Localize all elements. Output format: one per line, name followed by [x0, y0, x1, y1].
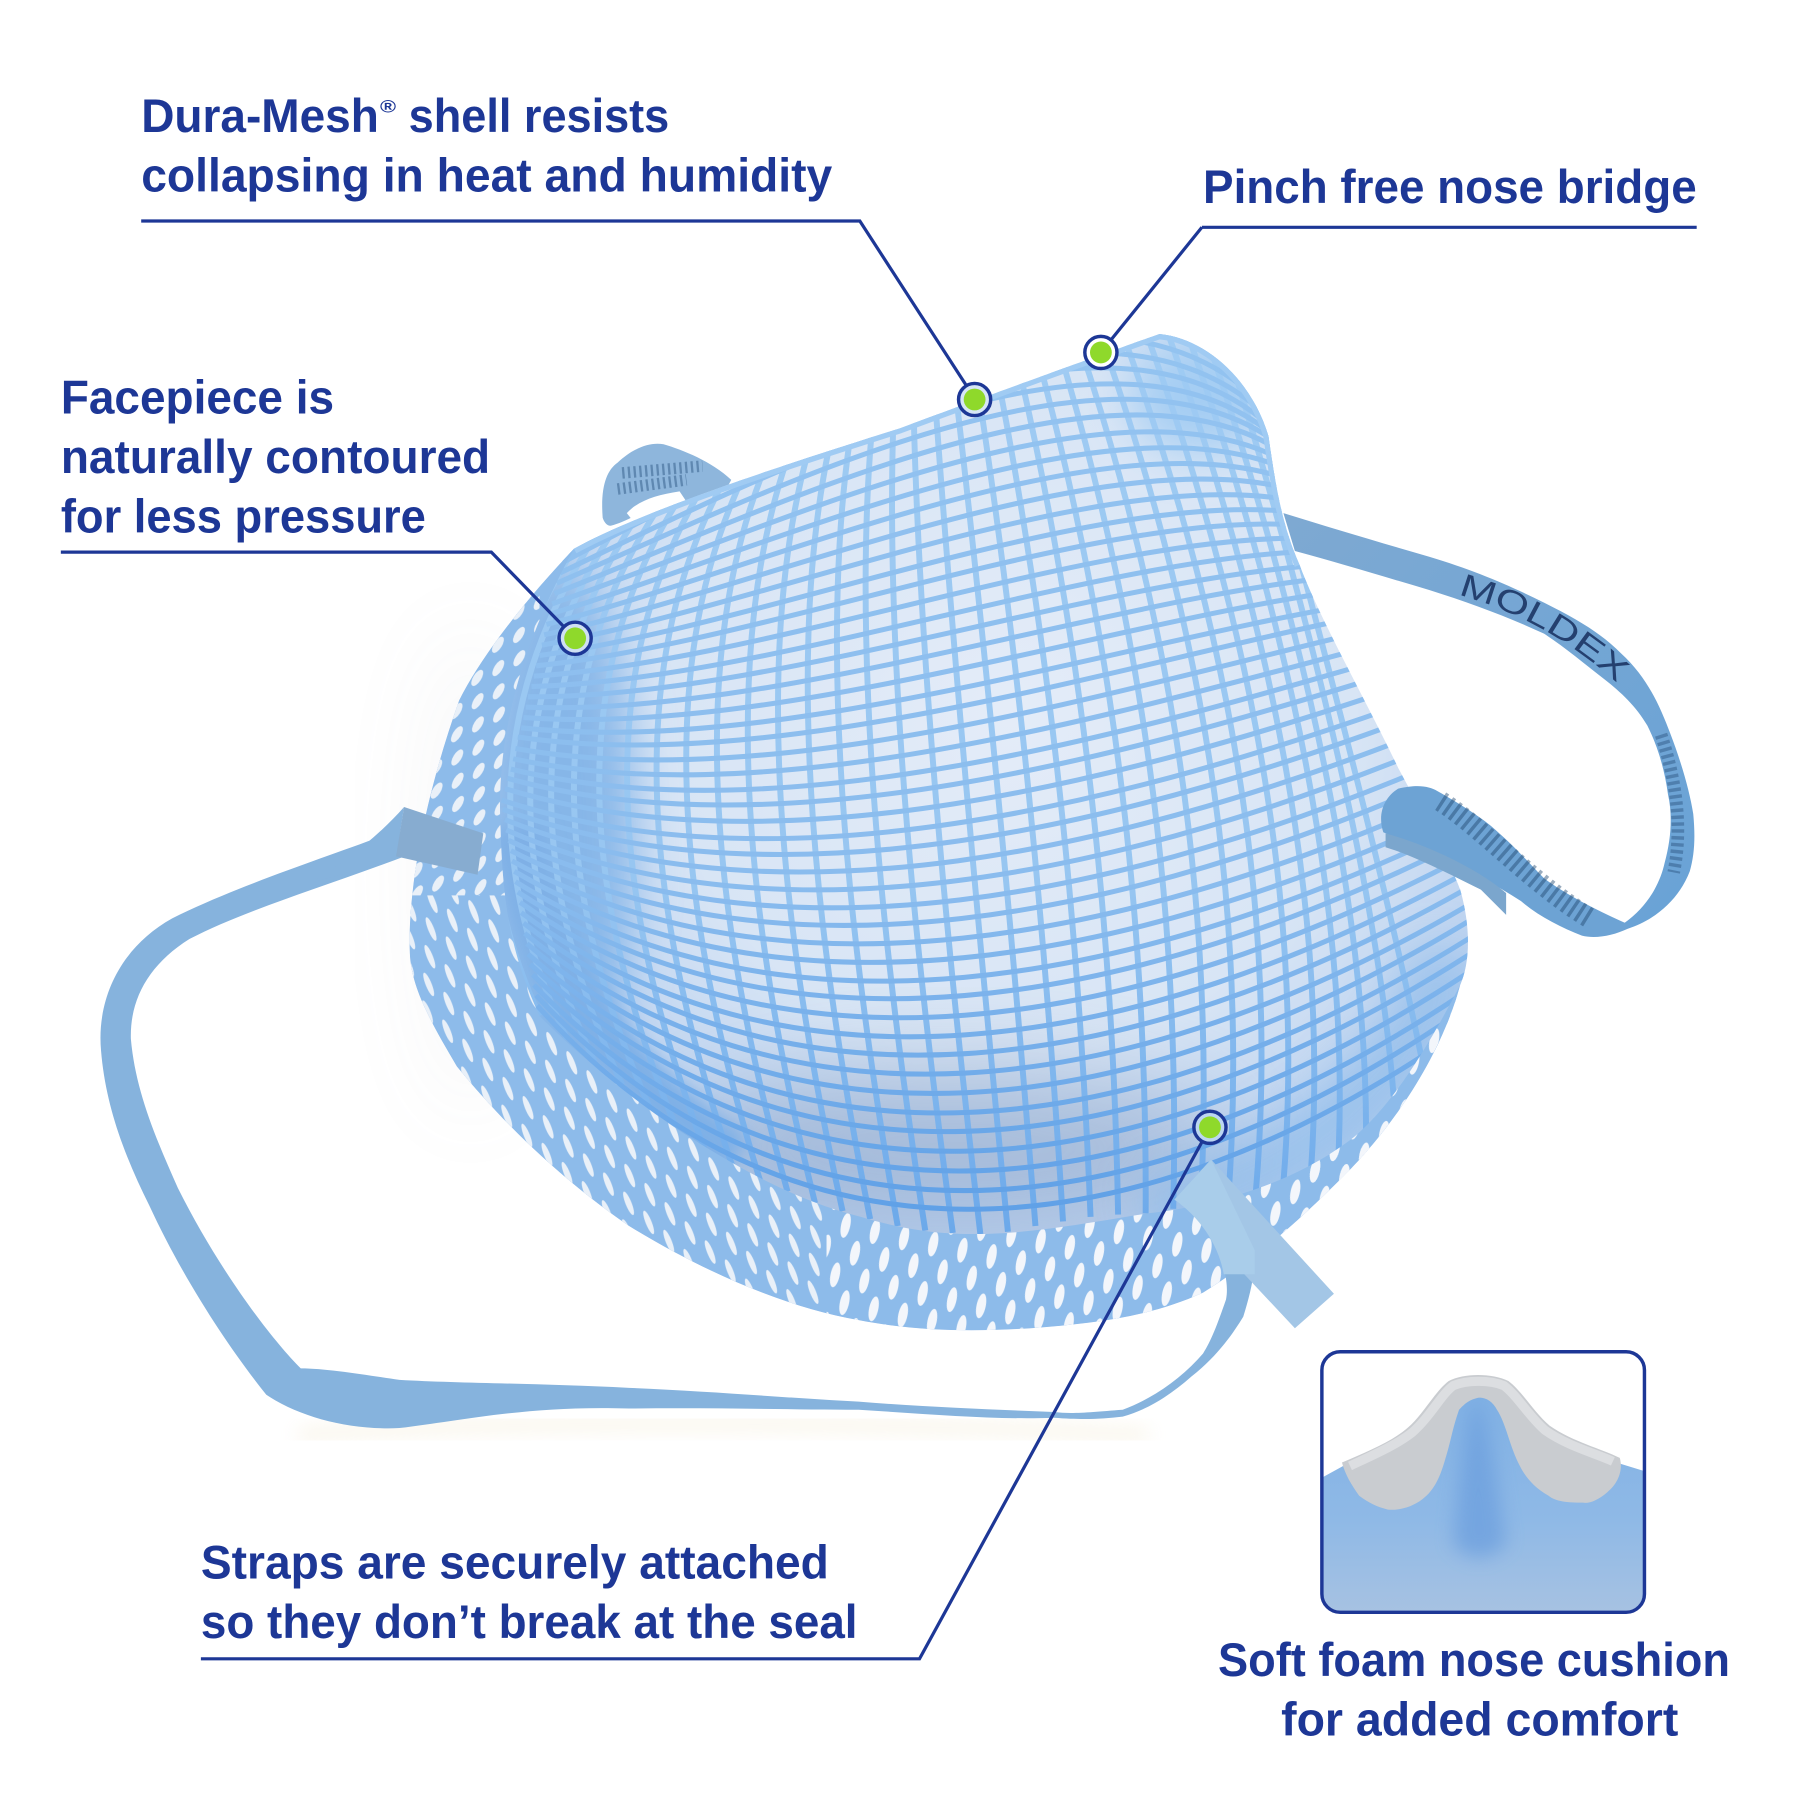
left strap attachment tab	[100, 807, 1255, 1428]
inset nose fold shadow	[1453, 1398, 1506, 1557]
left side tone	[482, 562, 735, 1159]
callout: Dura-Mesh shell: Dura-Mesh	[141, 89, 379, 142]
left strap band	[100, 830, 1255, 1428]
dot: Dura-Mesh shell	[959, 383, 991, 416]
inset: nose cushion photo	[1320, 1352, 1646, 1614]
callout: Dura-Mesh shell: shell resists	[409, 89, 669, 142]
underside fold	[1386, 833, 1506, 915]
callout: nose cushion: Soft foam nose cushion	[1218, 1633, 1730, 1686]
dot: straps	[1194, 1111, 1226, 1143]
nose top tone	[1131, 339, 1268, 453]
strap brand print	[1458, 595, 1623, 689]
left tab	[396, 807, 483, 875]
right strap with MOLDEX print	[1284, 513, 1694, 929]
mask body	[390, 320, 1515, 1355]
right strap with MOLDEX print: MOLDEX	[1461, 574, 1630, 682]
callout: nose bridge: Pinch free nose bridge	[1203, 160, 1697, 213]
callout: straps: Straps are securely attached	[201, 1535, 829, 1588]
horizontal mesh strands	[502, 320, 1481, 1209]
dot: facepiece	[559, 622, 591, 654]
vertical mesh strands	[492, 335, 1421, 1234]
inset mask fabric	[1320, 1382, 1646, 1614]
loop print marks	[618, 466, 703, 489]
inset frame	[1322, 1352, 1644, 1612]
loop print marks	[1441, 801, 1590, 918]
interior fabric	[390, 321, 1492, 1355]
inset foam cushion	[1342, 1375, 1621, 1510]
top strap loop	[602, 444, 731, 526]
bottom strap upper segment	[1174, 1159, 1255, 1274]
right strap attachment loop	[1381, 786, 1628, 937]
side strap print marks	[1661, 735, 1678, 872]
callout dots	[559, 336, 1226, 1143]
soft product shadows	[298, 620, 1148, 1435]
top rim band	[574, 334, 1299, 565]
strap band	[1283, 513, 1694, 929]
lower interior shadow	[677, 1068, 1228, 1228]
callout: straps	[201, 1535, 858, 1648]
callout: facepiece: naturally contoured	[61, 430, 490, 483]
callout: Dura-Mesh shell: ®	[380, 97, 396, 117]
loop opening	[627, 491, 689, 519]
dot: nose bridge	[1085, 336, 1117, 368]
brim with oval vent holes	[410, 555, 1460, 1330]
lower right tone	[1148, 953, 1452, 1215]
inset foam highlight	[1350, 1381, 1613, 1466]
left strap flare	[308, 807, 404, 884]
callout: facepiece	[61, 370, 490, 543]
callout: nose cushion	[1218, 1633, 1730, 1746]
bottom strap free tab	[1174, 1159, 1334, 1328]
callout: Dura-Mesh shell	[141, 89, 832, 202]
callout: Dura-Mesh shell: collapsing in heat and humidity	[141, 149, 832, 202]
callout: facepiece: for less pressure	[61, 490, 426, 543]
callout leader lines	[61, 221, 1697, 1659]
callout: facepiece: Facepiece is	[61, 370, 334, 423]
callout: straps: so they don’t break at the seal	[201, 1595, 858, 1648]
callout: nose cushion: for added comfort	[1281, 1693, 1679, 1746]
